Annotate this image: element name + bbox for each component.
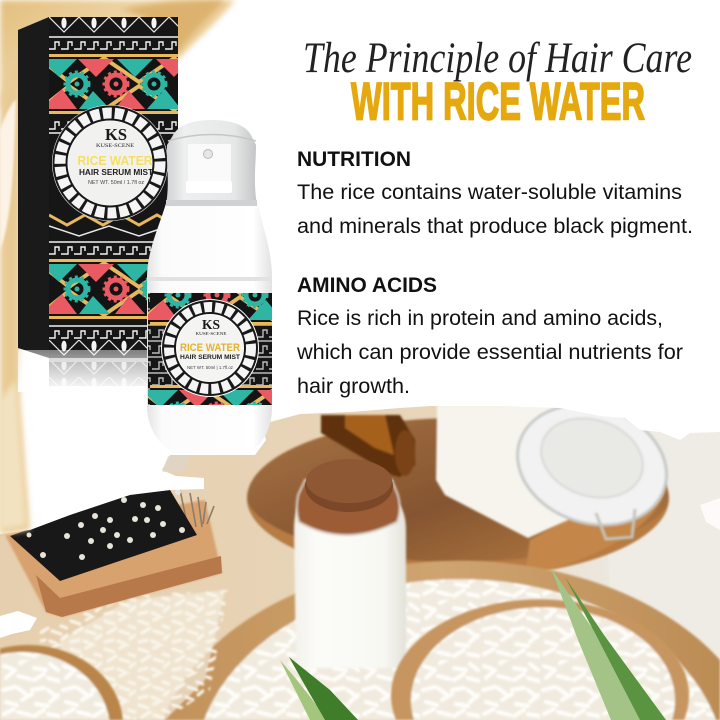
photo: green leaves: [280, 568, 666, 720]
torn white patch lower left: [0, 611, 37, 638]
product bottle: [147, 120, 272, 472]
bottle shoulder seam: [147, 277, 272, 281]
bottle label text: RICE WATER: [180, 342, 240, 354]
bottle label text: HAIR SERUM MIST: [180, 354, 240, 361]
box side panel: [18, 17, 49, 358]
brush bristles: [170, 490, 214, 532]
text block: nutrition: The rice contains water-soluble vitamins: [297, 180, 682, 204]
torn white patch right: [700, 498, 720, 530]
text block: amino acids: hair growth.: [297, 374, 410, 398]
text block: nutrition: NUTRITION: [297, 148, 411, 171]
bottle label text: NET WT. 50ml | 1.7fl.oz: [187, 365, 233, 370]
box round emblem: [52, 105, 168, 221]
photo: large wooden plate with rice: [163, 561, 720, 720]
clear cap: [166, 120, 257, 206]
box front pattern: [49, 17, 178, 358]
photo: small cork bowl of rice: [391, 599, 689, 720]
box floor reflection: [18, 350, 158, 392]
torn white overlay above the photo: [0, 0, 720, 534]
bottle label text: KUSE-SCENE: [196, 331, 227, 336]
bottle label: [148, 293, 272, 405]
bottom photo: table background: [0, 405, 720, 720]
box label text: [78, 125, 153, 186]
photo: small rice bowl left: [0, 645, 123, 720]
product box: [18, 17, 178, 392]
box label text: HAIR SERUM MIST: [79, 168, 153, 177]
box label text: RICE WATER: [78, 153, 153, 168]
bottle floor reflection: [162, 456, 190, 472]
photo: loose rice on the table: [40, 590, 228, 720]
photo: corked glass bottle of rice water: [294, 459, 406, 668]
box label text: NET WT. 50ml / 1.7fl oz: [88, 180, 145, 186]
bottle label text: [180, 318, 240, 370]
photo: hairbrush: [5, 489, 222, 617]
text block: amino acids: [296, 274, 683, 398]
photo: amber glass bottle: [321, 415, 415, 477]
photo: jar of rice milk with glass lid: [436, 386, 682, 544]
text block: nutrition: [297, 148, 693, 238]
bottle label text: KS: [202, 318, 220, 333]
bottle body: [147, 200, 272, 453]
title: [303, 35, 692, 132]
text block: amino acids: AMINO ACIDS: [297, 274, 437, 297]
photo: round wooden tray: [247, 418, 669, 578]
text block: nutrition: and minerals that produce black pigment.: [297, 214, 693, 238]
golden hair swoosh background: [0, 0, 235, 534]
text block: amino acids: Rice is rich in protein and amino acids,: [297, 306, 663, 330]
text block: amino acids: which can provide essential nutrients for: [296, 340, 683, 364]
box label text: KS: [105, 125, 127, 144]
box label text: KUSE-SCENE: [96, 143, 135, 149]
